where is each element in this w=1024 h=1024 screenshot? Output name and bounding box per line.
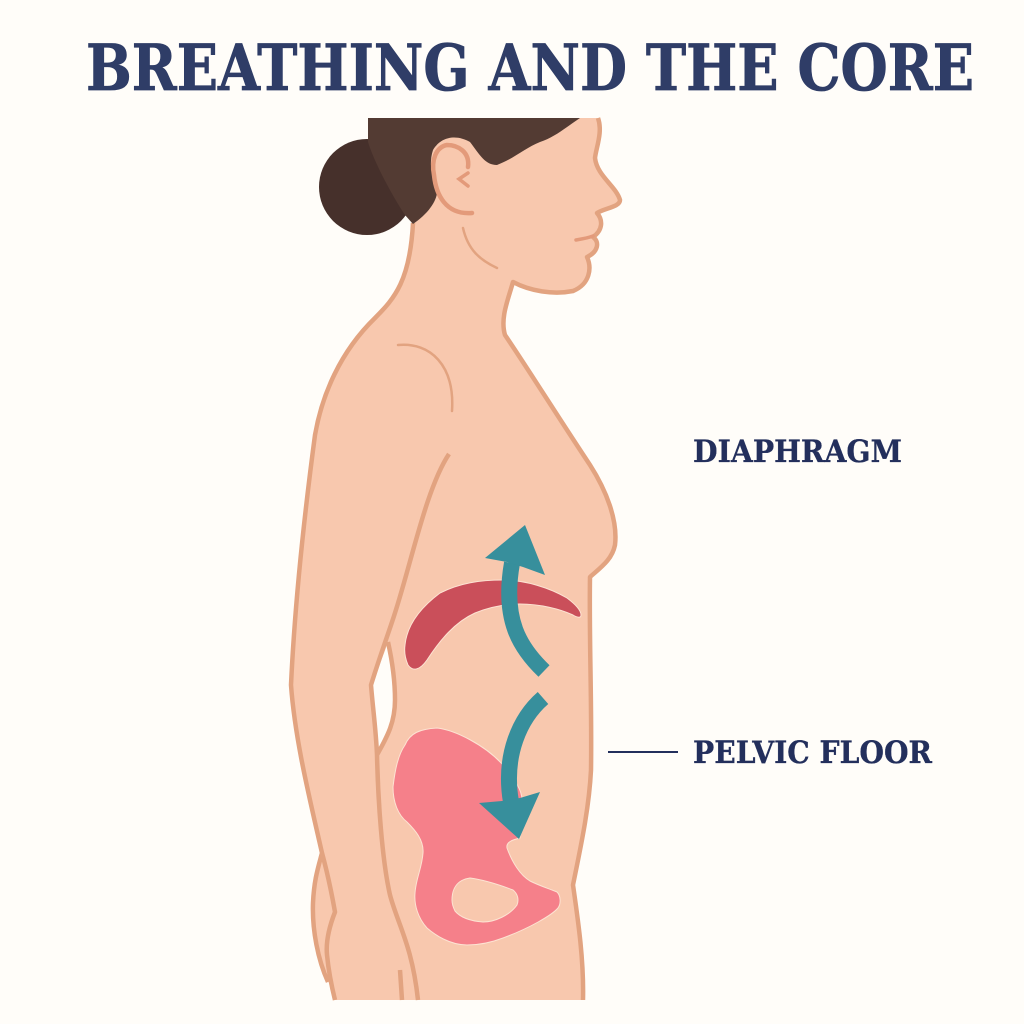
neck crease bbox=[463, 228, 497, 268]
inner ear bbox=[459, 173, 468, 186]
hair bbox=[368, 118, 580, 224]
label: pelvic floor: PELVIC FLOOR bbox=[693, 735, 932, 771]
label: diaphragm: DIAPHRAGM bbox=[693, 434, 902, 470]
diaphragm muscle bbox=[405, 580, 581, 669]
mouth bbox=[576, 236, 593, 240]
arm and torso inner lines bbox=[371, 454, 449, 1000]
arrow: downward bbox=[479, 698, 543, 839]
body outline bbox=[291, 118, 620, 1000]
hair bun bbox=[319, 139, 415, 235]
pelvic floor shape bbox=[393, 728, 560, 945]
body fill bbox=[291, 118, 620, 1000]
leader line: pelvic floor bbox=[608, 751, 678, 753]
shoulder line bbox=[398, 345, 452, 411]
ear bbox=[433, 145, 472, 213]
arrow: upward bbox=[485, 525, 545, 671]
white gap between arm and torso bbox=[371, 642, 395, 755]
figure: woman in profile bbox=[291, 118, 620, 1000]
